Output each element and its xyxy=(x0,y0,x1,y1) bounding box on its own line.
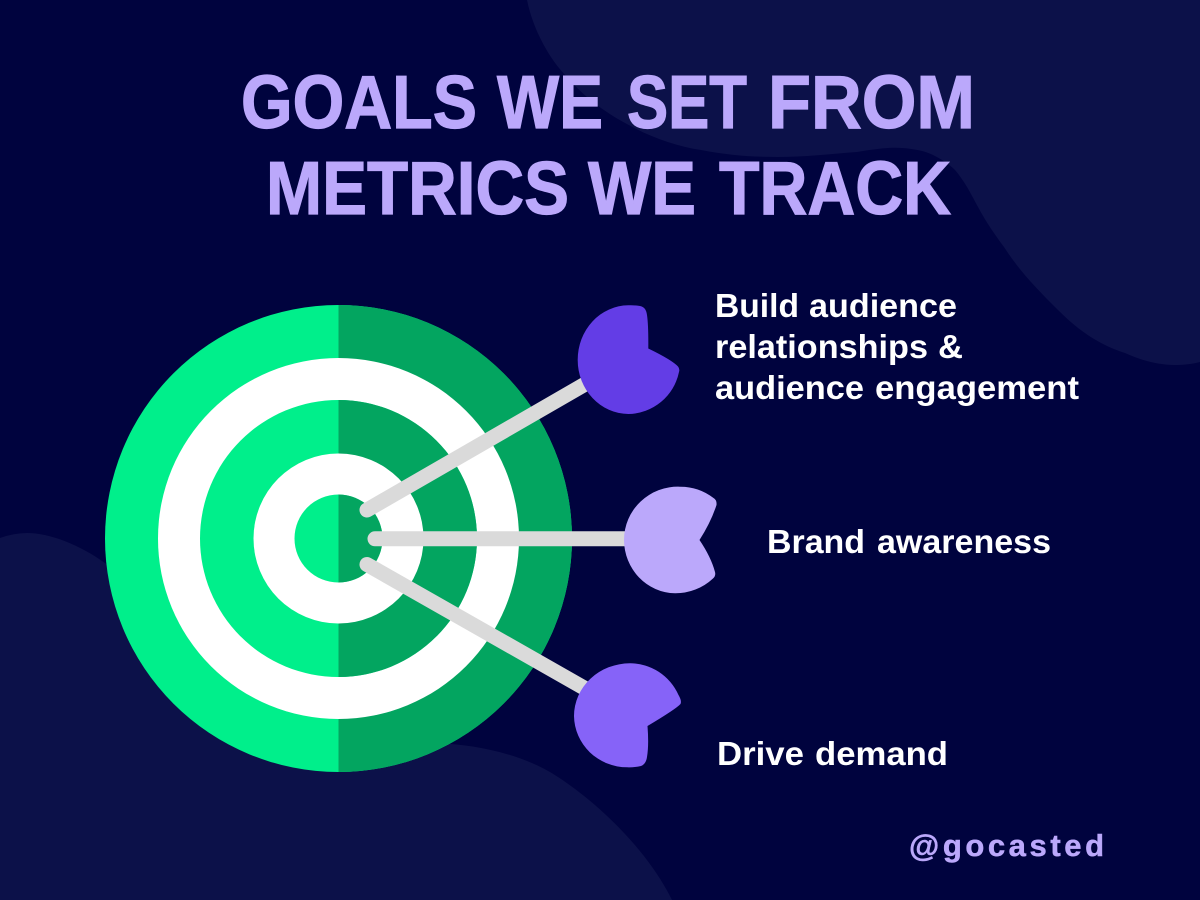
arrow: middle dart xyxy=(375,487,717,593)
arrow: top dart xyxy=(367,305,679,510)
text: build audience: & xyxy=(938,328,963,365)
title: FROM xyxy=(768,60,975,144)
text: build audience: Build xyxy=(715,287,799,324)
text: drive demand xyxy=(717,735,948,772)
title: WE xyxy=(497,60,603,144)
title: SET xyxy=(627,60,747,144)
text: build audience: relationships xyxy=(715,328,928,365)
text: build audience: audience xyxy=(715,369,864,406)
title: METRICS xyxy=(266,146,569,230)
handle: @gocasted xyxy=(909,828,1104,863)
text: brand awareness xyxy=(767,523,1051,560)
arrow: bottom dart xyxy=(367,564,681,767)
text: brand awareness: awareness xyxy=(877,523,1051,560)
text: build audience: audience xyxy=(809,287,957,324)
title: GOALS xyxy=(241,60,477,144)
title: TRACK xyxy=(719,146,951,230)
text: brand awareness: Brand xyxy=(767,523,865,560)
text: build audience: engagement xyxy=(875,369,1079,406)
text: build audience xyxy=(715,287,1079,406)
title xyxy=(241,60,975,230)
title: WE xyxy=(588,146,696,230)
text: drive demand: Drive xyxy=(717,735,804,772)
target xyxy=(105,305,572,772)
text: drive demand: demand xyxy=(815,735,948,772)
